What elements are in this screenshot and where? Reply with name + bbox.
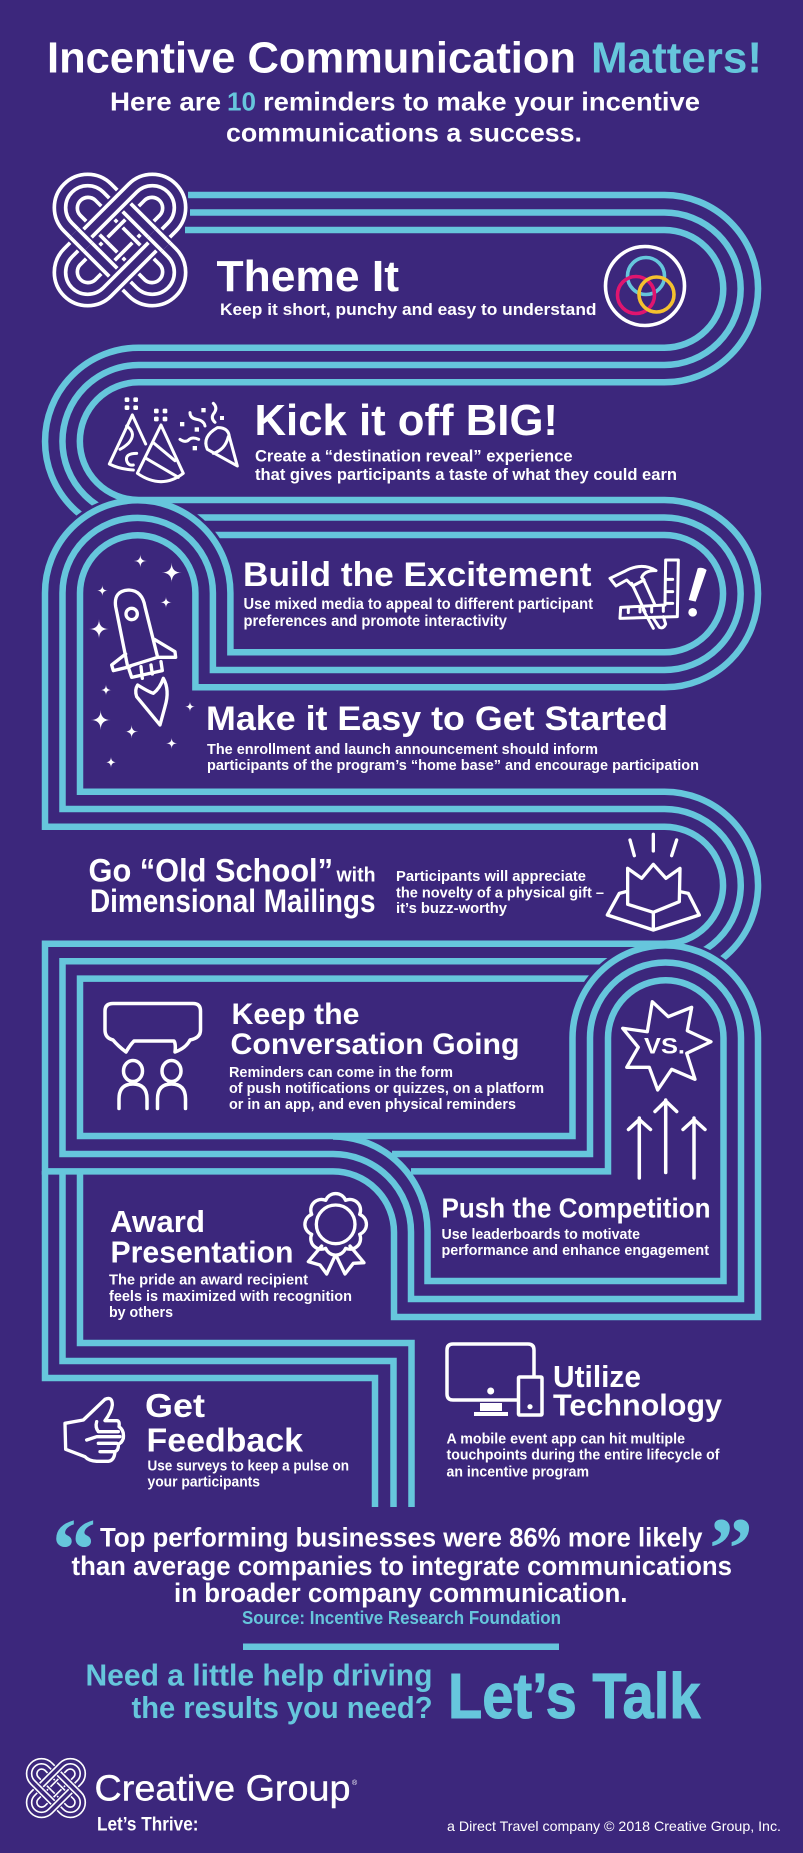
- icon: party hats: [109, 397, 237, 482]
- quote text: than average companies to integrate communications: [72, 1551, 732, 1581]
- heading: [88, 852, 376, 919]
- call to action: Need a little help driving: [86, 1658, 432, 1692]
- heading: Go “Old School”: [88, 852, 333, 888]
- description: it’s buzz-worthy: [396, 900, 508, 917]
- divider rule: [243, 1644, 559, 1650]
- description: [229, 1065, 544, 1113]
- quote marks: “: [52, 1502, 96, 1599]
- heading: [230, 998, 520, 1061]
- panel: utilize technology: [446, 1344, 723, 1480]
- description: [244, 596, 593, 630]
- description: [148, 1458, 349, 1490]
- icon: open gift box: [607, 834, 699, 930]
- icon: hammer and ruler: [610, 560, 707, 628]
- description: that gives participants a taste of what they could earn: [255, 466, 677, 484]
- heading: with: [336, 864, 376, 886]
- icon: thumbs up: [65, 1398, 123, 1461]
- quote text: [72, 1522, 732, 1608]
- description: your participants: [148, 1474, 260, 1490]
- quote: [52, 1501, 753, 1628]
- heading: Kick it off BIG!: [254, 396, 558, 445]
- heading: Get: [145, 1387, 205, 1424]
- title: Matters!: [591, 34, 762, 82]
- registered mark: ®: [352, 1779, 358, 1787]
- icon: small knot: [29, 1761, 83, 1815]
- subtitle: communications a success.: [226, 118, 582, 148]
- wordmark: Creative Group: [94, 1768, 350, 1808]
- title: Incentive Communication: [47, 34, 576, 82]
- description: by others: [109, 1305, 173, 1321]
- description: the novelty of a physical gift –: [396, 884, 604, 902]
- panel: get feedback: [65, 1387, 349, 1490]
- heading: Dimensional Mailings: [90, 883, 376, 919]
- panel: old school mailings: [88, 834, 699, 930]
- description: [442, 1227, 709, 1259]
- heading: Build the Excitement: [243, 556, 592, 594]
- panel: award presentation: [109, 1194, 366, 1321]
- description: Keep it short, punchy and easy to understand: [220, 301, 596, 319]
- panel: keep the conversation going: [105, 998, 544, 1113]
- call to action: [86, 1658, 701, 1732]
- quote text: in broader company communication.: [174, 1578, 628, 1608]
- heading: [145, 1387, 304, 1458]
- heading: Technology: [553, 1388, 723, 1422]
- description: Create a “destination reveal” experience: [255, 448, 572, 466]
- description: feels is maximized with recognition: [109, 1289, 352, 1305]
- description: or in an app, and even physical reminders: [229, 1097, 516, 1113]
- subtitle: 10: [227, 86, 256, 116]
- icon: overlapping rings: [606, 246, 684, 326]
- winding cyan path: [45, 195, 758, 1507]
- subtitle: reminders to make your incentive: [263, 86, 700, 116]
- heading: Feedback: [146, 1422, 304, 1458]
- heading: Award: [110, 1204, 205, 1239]
- heading: Presentation: [110, 1234, 294, 1270]
- heading: Theme It: [216, 252, 399, 301]
- heading: Utilize: [553, 1359, 641, 1394]
- description: The pride an award recipient: [109, 1272, 308, 1288]
- heading: [553, 1359, 723, 1422]
- subtitle: Here are: [110, 86, 221, 116]
- description: Use surveys to keep a pulse on: [148, 1458, 349, 1474]
- source: Source: Incentive Research Foundation: [242, 1608, 561, 1628]
- heading: [110, 1204, 294, 1270]
- icon: award ribbon: [305, 1194, 366, 1274]
- quote marks: ”: [709, 1501, 753, 1598]
- description: A mobile event app can hit multiple: [446, 1432, 685, 1448]
- description: [207, 741, 699, 774]
- description: Participants will appreciate: [396, 868, 586, 885]
- description: an incentive program: [446, 1464, 589, 1480]
- icon: versus star: [623, 1002, 711, 1090]
- icon: knot logo: [60, 180, 180, 300]
- panel: kick it off big: [109, 396, 677, 484]
- call to action: the results you need?: [132, 1690, 432, 1725]
- panel: theme it: [216, 246, 684, 326]
- icon: three up arrows: [628, 1100, 705, 1178]
- description: [446, 1432, 720, 1480]
- panel: make it easy to get started: [206, 700, 699, 774]
- panel: push the competition: [442, 1002, 711, 1259]
- heading: Keep the: [232, 998, 360, 1031]
- icon: versus star: VS.: [644, 1034, 685, 1058]
- icon: monitor and phone: [447, 1344, 542, 1416]
- description: The enrollment and launch announcement should inform: [207, 741, 598, 758]
- panel: build the excitement: [243, 556, 707, 630]
- quote marks: [52, 1501, 753, 1599]
- description: Reminders can come in the form: [229, 1065, 453, 1081]
- description: Use leaderboards to motivate: [442, 1227, 640, 1243]
- icon: speech bubble and people: [105, 1004, 200, 1108]
- description: [109, 1272, 352, 1321]
- footer logo: [29, 1761, 358, 1836]
- description: [396, 868, 604, 917]
- description: [255, 448, 677, 484]
- call to action: Let’s Talk: [448, 1660, 701, 1732]
- icon: rocket and stars: [89, 554, 195, 768]
- heading: Make it Easy to Get Started: [206, 700, 668, 738]
- tagline: Let’s Thrive:: [97, 1814, 198, 1836]
- description: preferences and promote interactivity: [244, 613, 507, 630]
- description: performance and enhance engagement: [442, 1243, 709, 1259]
- heading: Push the Competition: [442, 1192, 710, 1224]
- description: Use mixed media to appeal to different participant: [244, 596, 593, 613]
- quote text: Top performing businesses were 86% more likely: [100, 1522, 702, 1552]
- subtitle: [110, 86, 700, 148]
- heading: Conversation Going: [230, 1028, 520, 1061]
- copyright: a Direct Travel company © 2018 Creative Group, Inc.: [447, 1818, 781, 1834]
- description: of push notifications or quizzes, on a platform: [229, 1081, 544, 1097]
- description: touchpoints during the entire lifecycle of: [446, 1448, 720, 1464]
- description: participants of the program’s “home base” and encourage participation: [207, 757, 699, 774]
